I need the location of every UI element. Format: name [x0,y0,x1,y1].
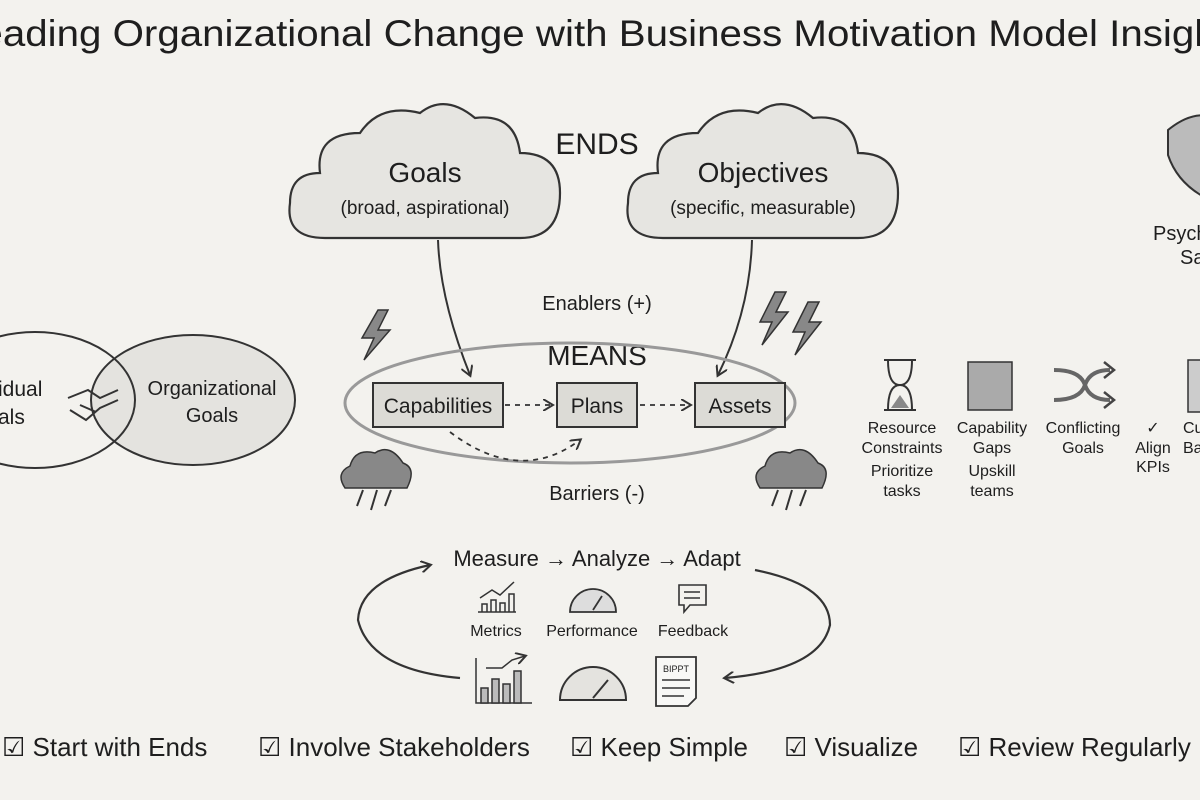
challenges row: tasks [883,483,921,500]
icon: small gauge [570,589,616,612]
label: means: MEANS [547,340,647,371]
icon: lightning right [760,292,821,355]
cloud: objectives: Objectives [698,157,828,188]
challenges row: Goals [1062,440,1104,457]
cloud: goals: Goals [388,157,462,188]
icon: shield [1168,115,1200,200]
icon: small metrics [478,582,516,612]
cloud: objectives: (specific, measurable) [670,198,856,219]
challenges row: Gaps [973,440,1011,457]
checklist row [2,732,1191,762]
checklist row: ☑ Involve Stakeholders [258,732,530,762]
icon: report [656,657,696,706]
challenges row: Upskill [968,463,1016,480]
challenges row: Conflicting [1046,420,1120,437]
box: capabilities [373,383,503,427]
challenges row: Resource [868,420,936,437]
venn diagram: Organizational [148,378,276,400]
challenges row: teams [970,483,1014,500]
icon: puzzle [968,362,1012,410]
label: enablers: Enablers (+) [542,293,652,315]
box: plans [557,383,637,427]
icon: report: BIPPT [663,664,690,674]
feedback loop: Performance [546,623,638,640]
challenges row [862,360,1200,500]
challenges row: Constraints [862,440,942,457]
cloud: goals: (broad, aspirational) [341,198,509,219]
means ellipse [345,343,795,463]
venn diagram: Goals [186,405,238,427]
arrow: objectives to assets [718,240,752,375]
label: barriers: Barriers (-) [549,483,645,505]
icon: big gauge [560,667,626,700]
icon: crossing arrows [1054,370,1110,400]
box: plans: Plans [571,395,623,418]
challenges row: Capability [957,420,1027,437]
challenges row: KPIs [1136,459,1170,476]
checklist row: ☑ Review Regularly [958,732,1191,762]
label: ENDS: ENDS [555,128,639,161]
dashed arrows [450,405,690,461]
icon: speech bubble [679,585,706,612]
box: capabilities: Capabilities [384,395,492,418]
challenges row: ✓ [1146,420,1160,437]
challenges row: Align [1135,440,1171,457]
checklist row: ☑ Start with Ends [2,732,207,762]
feedback loop [358,546,830,706]
venn diagram [0,332,295,468]
cloud: objectives [627,104,898,238]
challenges row: Prioritize [871,463,933,480]
checklist row: ☑ Visualize [784,732,918,762]
feedback loop: Metrics [470,623,522,640]
label: psychological safety [1153,223,1200,269]
icon: lightning left [362,310,390,360]
checklist row: ☑ Keep Simple [570,732,748,762]
icon: hourglass [884,360,916,410]
icon: storm cloud right [756,450,826,510]
cloud: goals [289,104,560,238]
box: assets: Assets [708,395,772,418]
feedback loop: Measure → Analyze → Adapt [453,546,741,571]
icon: storm cloud left [341,450,411,510]
arrow: goals to capabilities [438,240,470,375]
box: assets [695,383,785,427]
feedback loop: Feedback [658,623,729,640]
icon: big chart [476,656,532,703]
icon: handshake [68,390,118,420]
